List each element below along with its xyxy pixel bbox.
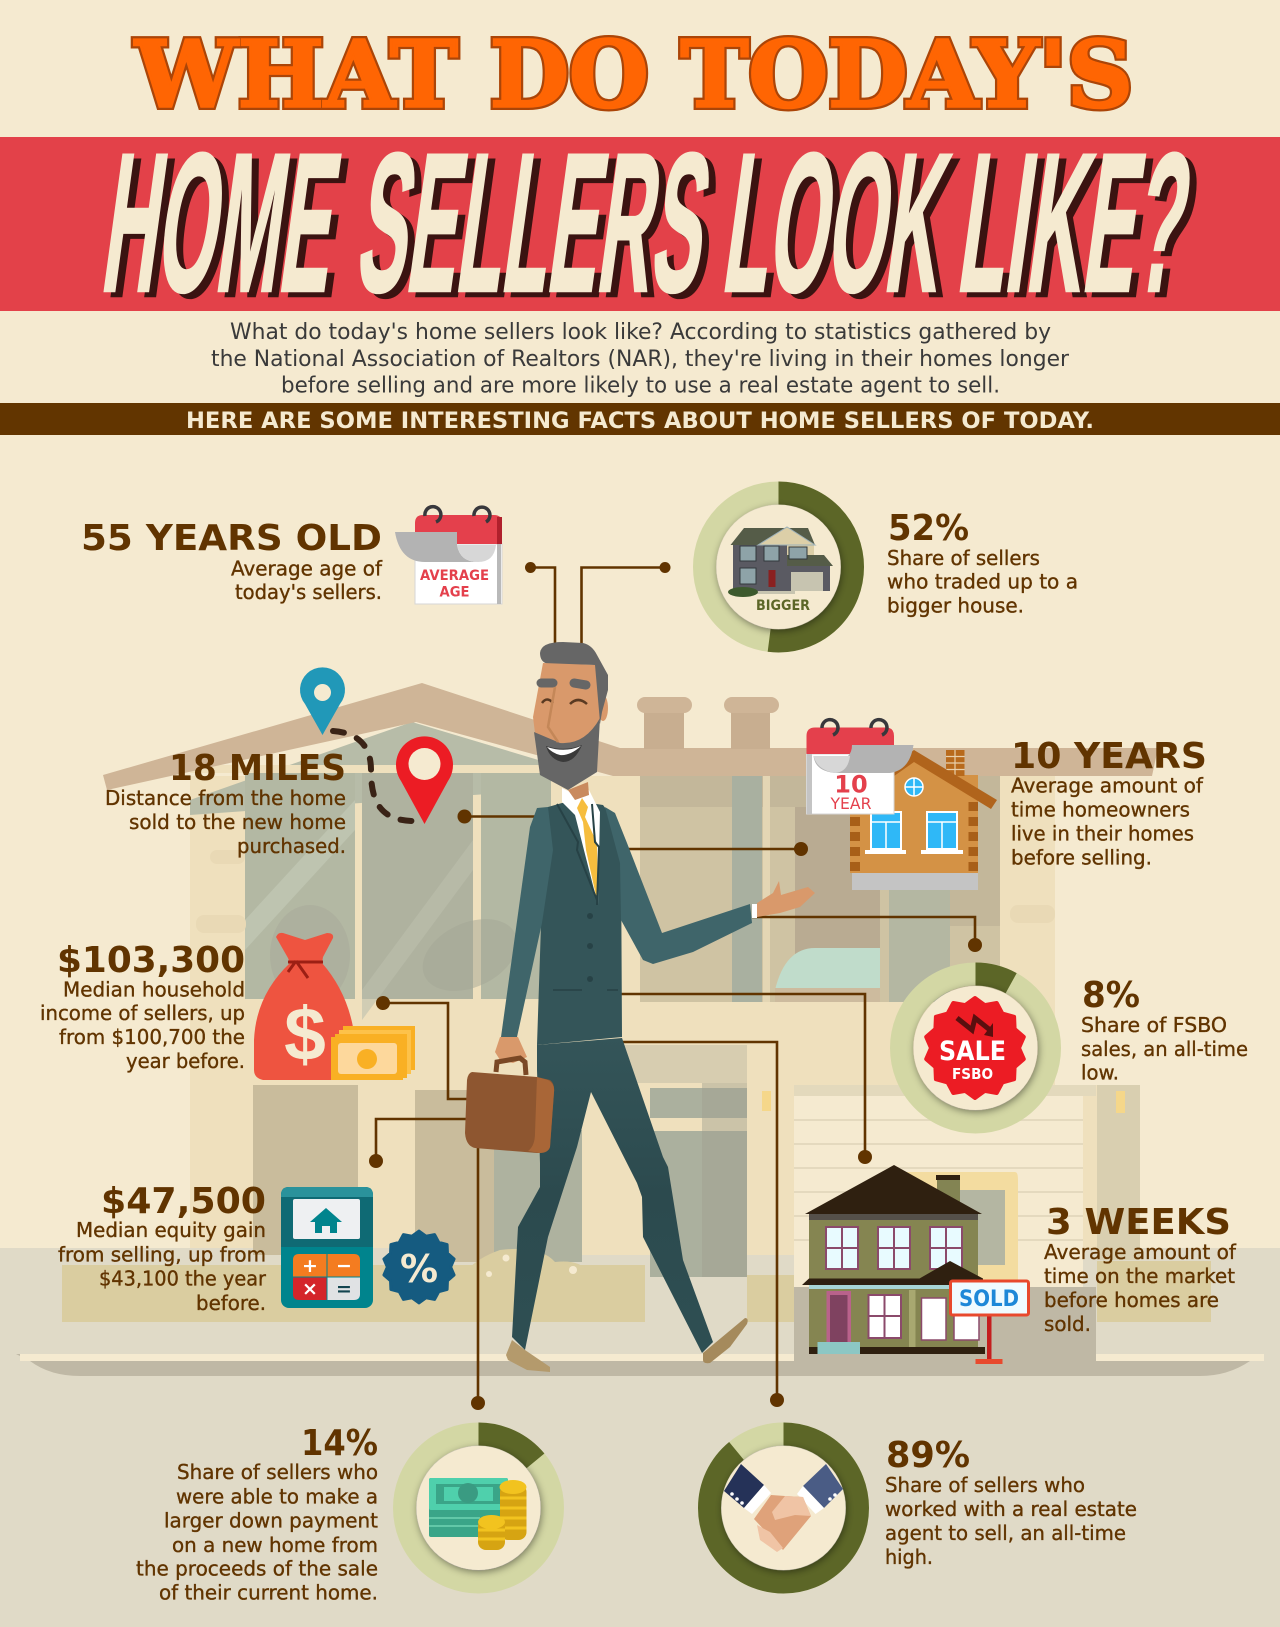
ear (598, 695, 608, 721)
smile (546, 745, 582, 762)
icon: bigger house (728, 527, 833, 614)
brown subheading bar: HERE ARE SOME INTERESTING FACTS ABOUT HOME SELLERS OF TODAY. (186, 409, 1094, 434)
text: 52%: Share of sellers (887, 546, 1040, 570)
text: 14%: on a new home from (172, 1533, 378, 1557)
donut chart 14% (404, 1434, 552, 1582)
stat: 3 weeks: sold. (1044, 1312, 1091, 1336)
stat: $103,300: year before. (126, 1049, 245, 1073)
stat: 55 years old: 55 YEARS OLD (81, 518, 382, 559)
icon: sold house: SOLD (959, 1287, 1019, 1312)
stat: $47,500: $47,500 (101, 1181, 266, 1222)
title: home sellers look like?: HOME (100, 118, 358, 339)
text: 8%: sales, an all-time (1081, 1037, 1248, 1061)
left hand (495, 1037, 527, 1063)
icon: handshake (724, 1464, 843, 1552)
hair (540, 642, 608, 724)
stat: 3 weeks: time on the market (1044, 1264, 1235, 1288)
text: 89%: Share of sellers who (885, 1473, 1085, 1497)
businessman illustration (465, 642, 815, 1372)
pockets (553, 989, 618, 991)
icon: average age calendar: AGE (440, 584, 470, 600)
title: what do today's: WHAT DO TODAY'S (134, 20, 1133, 128)
jacket buttons (587, 913, 593, 982)
icon: sale badge (926, 998, 1024, 1098)
stat: 3 weeks (1044, 1202, 1237, 1336)
stat: 10 years (1011, 736, 1207, 870)
eyebrows (541, 683, 586, 685)
title: home sellers look like?: SELLERS (355, 118, 729, 339)
stat: $47,500 (58, 1181, 267, 1315)
icon: average age calendar: AVERAGE (420, 568, 489, 584)
stat: 18 miles: 18 MILES (169, 748, 346, 789)
stat: 10 years: 10 YEARS (1011, 736, 1207, 777)
icon: money bag with cash (254, 933, 415, 1080)
panel: 14% down payment (136, 1423, 552, 1604)
intro paragraph: What do today's home sellers look like? According to statistics gathered by (230, 320, 1051, 345)
stat: $47,500: $43,100 the year (99, 1266, 267, 1290)
panel: 8% FSBO (902, 974, 1248, 1122)
icon: percent badge: % (400, 1247, 438, 1291)
briefcase (465, 1072, 554, 1153)
background illustration: house and street (0, 683, 1280, 1627)
title: home sellers look like?: HOME (93, 113, 351, 334)
face (533, 663, 600, 745)
text: 89%: agent to sell, an all-time (885, 1521, 1126, 1545)
icon: money bag with cash: $ (284, 992, 326, 1076)
stat: 55 years old: today's sellers. (235, 580, 382, 604)
right sleeve (605, 807, 752, 964)
stat: $47,500: from selling, up from (58, 1242, 266, 1266)
stat: 3 weeks: Average amount of (1044, 1240, 1237, 1264)
stat: 3 weeks: before homes are (1044, 1288, 1219, 1312)
icon: cash and coins (429, 1478, 526, 1550)
jacket torso (537, 803, 622, 1045)
icon: calculator (281, 1187, 373, 1308)
icon: calculator: = (336, 1278, 352, 1300)
text: 14%: were able to make a (176, 1484, 378, 1508)
stat: 55 years old: Average age of (231, 556, 383, 580)
eyes (542, 700, 587, 704)
text: 89%: 89% (886, 1435, 970, 1476)
stat: 3 weeks: 3 WEEKS (1046, 1202, 1231, 1243)
right shoe (703, 1318, 748, 1363)
icon: calculator: − (336, 1255, 352, 1277)
icon: house with 10 year calendar (806, 720, 997, 890)
text: 89% (885, 1435, 1137, 1569)
text: 14%: 14% (301, 1423, 378, 1464)
stat: 10 years: before selling. (1011, 846, 1152, 870)
icon: calculator: + (302, 1255, 318, 1277)
nose (548, 687, 558, 742)
beard (534, 718, 600, 790)
title: home sellers look like?: SELLERS (348, 113, 722, 334)
stat: 10 years: Average amount of (1011, 774, 1204, 798)
intro paragraph: the National Association of Realtors (NAR), they're living in their homes longer (211, 347, 1070, 372)
title: what do today's: WHAT DO TODAY'S (134, 20, 1133, 128)
right hand (757, 881, 815, 917)
text: 14%: Share of sellers who (177, 1460, 378, 1484)
text: 14%: larger down payment (164, 1508, 378, 1532)
stat: 18 miles: Distance from the home (105, 786, 346, 810)
text: 8%: low. (1081, 1060, 1119, 1084)
text: 52%: bigger house. (887, 594, 1024, 618)
icon: sale badge: FSBO (952, 1065, 993, 1083)
text: 8% (1081, 975, 1248, 1084)
right cuff (752, 904, 757, 918)
necktie (577, 798, 598, 905)
neck (568, 782, 589, 800)
text: 52%: 52% (888, 508, 969, 549)
stat: 10 years: live in their homes (1011, 822, 1194, 846)
text: 8%: Share of FSBO (1081, 1013, 1227, 1037)
text: 14%: of their current home. (159, 1580, 378, 1604)
left sleeve (501, 807, 553, 1037)
connector lines and dots (369, 562, 982, 1410)
stat: $103,300: $103,300 (57, 940, 245, 981)
briefcase handle (496, 1058, 526, 1075)
panel: 89% real estate agent (710, 1434, 1137, 1582)
icon: percent badge (384, 1231, 454, 1303)
icon: bigger house: BIGGER (756, 598, 810, 614)
text: 52%: who traded up to a (887, 570, 1078, 594)
red banner (0, 137, 1280, 311)
text: 89%: worked with a real estate (885, 1497, 1137, 1521)
panel: 52% bigger house (704, 493, 1078, 641)
stat: $47,500: before. (196, 1291, 266, 1315)
brown subheading bar (0, 403, 1280, 435)
stat: $103,300: from $100,700 the (59, 1025, 245, 1049)
icon: house with 10 year calendar: 10 (834, 770, 868, 798)
icon: calculator: × (302, 1278, 318, 1300)
icon: sold house (802, 1165, 1028, 1364)
stat: 18 miles (105, 748, 346, 858)
icon: average age calendar (395, 507, 502, 604)
stat: 10 years: time homeowners (1011, 798, 1190, 822)
text: 52% (887, 508, 1078, 618)
legs (512, 1038, 713, 1353)
text: 14%: the proceeds of the sale (136, 1556, 378, 1580)
donut chart 8% (902, 974, 1050, 1122)
stat: 18 miles: sold to the new home (129, 810, 346, 834)
intro paragraph (211, 320, 1070, 398)
stat: 18 miles: purchased. (237, 834, 346, 858)
text: 8%: 8% (1082, 975, 1140, 1016)
donut chart 52% (704, 493, 852, 641)
text: 89%: high. (885, 1545, 933, 1569)
text: 14% (136, 1423, 378, 1604)
briefcase side (528, 1077, 554, 1153)
left shoe (506, 1340, 550, 1372)
shirt (562, 788, 600, 905)
icon: house with 10 year calendar: YEAR (830, 794, 872, 813)
donut chart 89% (710, 1434, 858, 1582)
intro paragraph: before selling and are more likely to use a real estate agent to sell. (281, 374, 1000, 398)
lapels (557, 804, 599, 905)
stat: 55 years old (81, 518, 383, 604)
icon: sale badge: SALE (939, 1036, 1006, 1067)
stat: $47,500: Median equity gain (76, 1218, 266, 1242)
stat: $103,300: Median household (63, 978, 245, 1002)
icon: map pins and dashed route (300, 667, 453, 824)
stat: $103,300 (40, 940, 245, 1073)
stat: $103,300: income of sellers, up (40, 1001, 245, 1025)
